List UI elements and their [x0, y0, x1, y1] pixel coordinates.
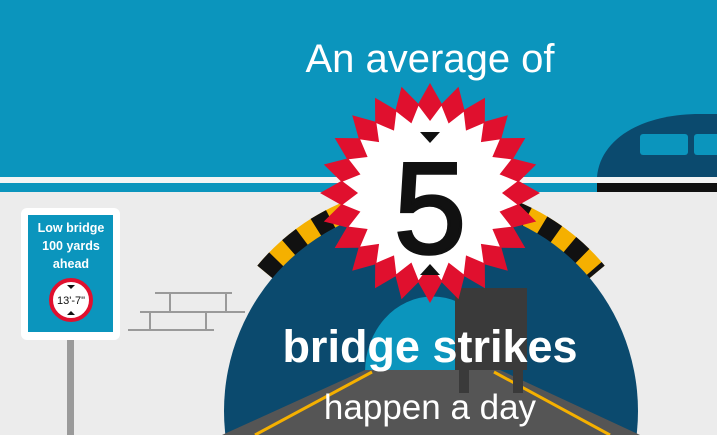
train	[597, 114, 717, 192]
road sign	[21, 208, 120, 435]
bricks	[128, 293, 245, 330]
heading: An average of	[305, 37, 555, 81]
road sign: ahead	[53, 257, 89, 271]
road sign: 13'-7"	[57, 295, 85, 307]
starburst: 5	[394, 135, 466, 281]
hazard arch	[265, 194, 597, 272]
road sign: Low bridge	[38, 221, 104, 235]
bridge strikes text: bridge strikes	[282, 321, 578, 372]
road sign: 100 yards	[42, 239, 100, 253]
tunnel	[222, 204, 640, 435]
truck	[455, 288, 527, 393]
happen a day text: happen a day	[324, 388, 537, 427]
starburst	[320, 83, 540, 303]
sky band	[0, 0, 717, 177]
